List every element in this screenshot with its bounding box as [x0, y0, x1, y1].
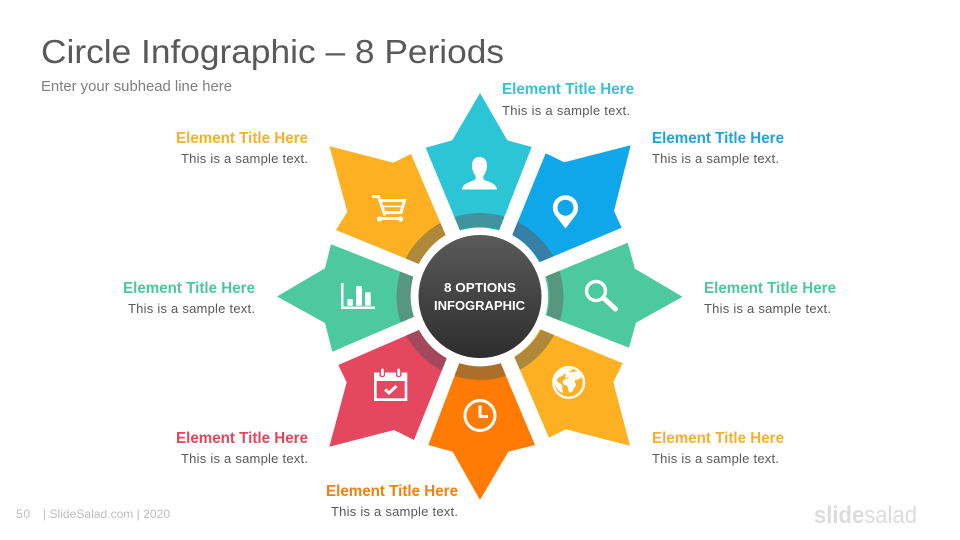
panel: bottom orange petal — [428, 363, 535, 500]
footer: page number and source: | SlideSalad.com | 2020 — [43, 507, 170, 521]
icon: map pin — [553, 195, 578, 228]
subhead: Enter your subhead line here — [41, 78, 232, 95]
label: lower left red: Element Title Here — [176, 430, 308, 447]
label: bottom orange: This is a sample text. — [331, 504, 458, 519]
hub label: 8 OPTIONS — [444, 281, 516, 295]
label: right green — [704, 280, 836, 316]
panel: upper left yellow petal — [330, 146, 446, 264]
panel: lower right yellow petal — [514, 329, 630, 446]
icon: globe — [553, 367, 584, 398]
label: top teal — [502, 81, 634, 118]
label: lower right yellow: This is a sample text. — [652, 451, 779, 466]
label: lower left red: This is a sample text. — [181, 451, 308, 466]
label: top teal: Element Title Here — [502, 81, 634, 98]
label: right green: This is a sample text. — [704, 301, 831, 316]
icon: person — [462, 157, 497, 190]
label: bottom orange — [326, 483, 458, 519]
label: right green: Element Title Here — [704, 280, 836, 297]
icon: bar chart — [341, 283, 375, 309]
label: top teal: This is a sample text. — [502, 103, 630, 118]
footer: page number and source: 50 — [16, 507, 30, 521]
panel: right green petal — [545, 242, 682, 348]
label: left green: This is a sample text. — [128, 301, 255, 316]
label: top right blue — [652, 130, 784, 166]
icon: clock — [465, 400, 495, 430]
logo: slidesalad wordmark: slidesalad — [814, 502, 917, 529]
hub label: INFOGRAPHIC — [434, 299, 525, 313]
label: lower left red — [176, 430, 308, 466]
label: upper left yellow — [176, 130, 308, 166]
panel: top teal petal — [426, 93, 532, 230]
label: bottom orange: Element Title Here — [326, 483, 458, 500]
label: upper left yellow: Element Title Here — [176, 130, 308, 147]
panel: left green petal — [277, 244, 414, 352]
icon: shopping cart — [372, 196, 404, 221]
label: left green — [123, 280, 255, 316]
icon: calendar — [374, 368, 407, 401]
label: lower right yellow: Element Title Here — [652, 430, 784, 447]
label: top right blue: Element Title Here — [652, 130, 784, 147]
panel: lower left red petal — [329, 330, 447, 447]
panel: top right blue petal — [512, 145, 631, 262]
label: upper left yellow: This is a sample text. — [181, 151, 308, 166]
title: Circle Infographic – 8 Periods — [41, 33, 504, 70]
center hub — [418, 235, 542, 358]
icon: magnifier — [586, 282, 616, 309]
label: lower right yellow — [652, 430, 784, 466]
label: top right blue: This is a sample text. — [652, 151, 779, 166]
label: left green: Element Title Here — [123, 280, 255, 297]
